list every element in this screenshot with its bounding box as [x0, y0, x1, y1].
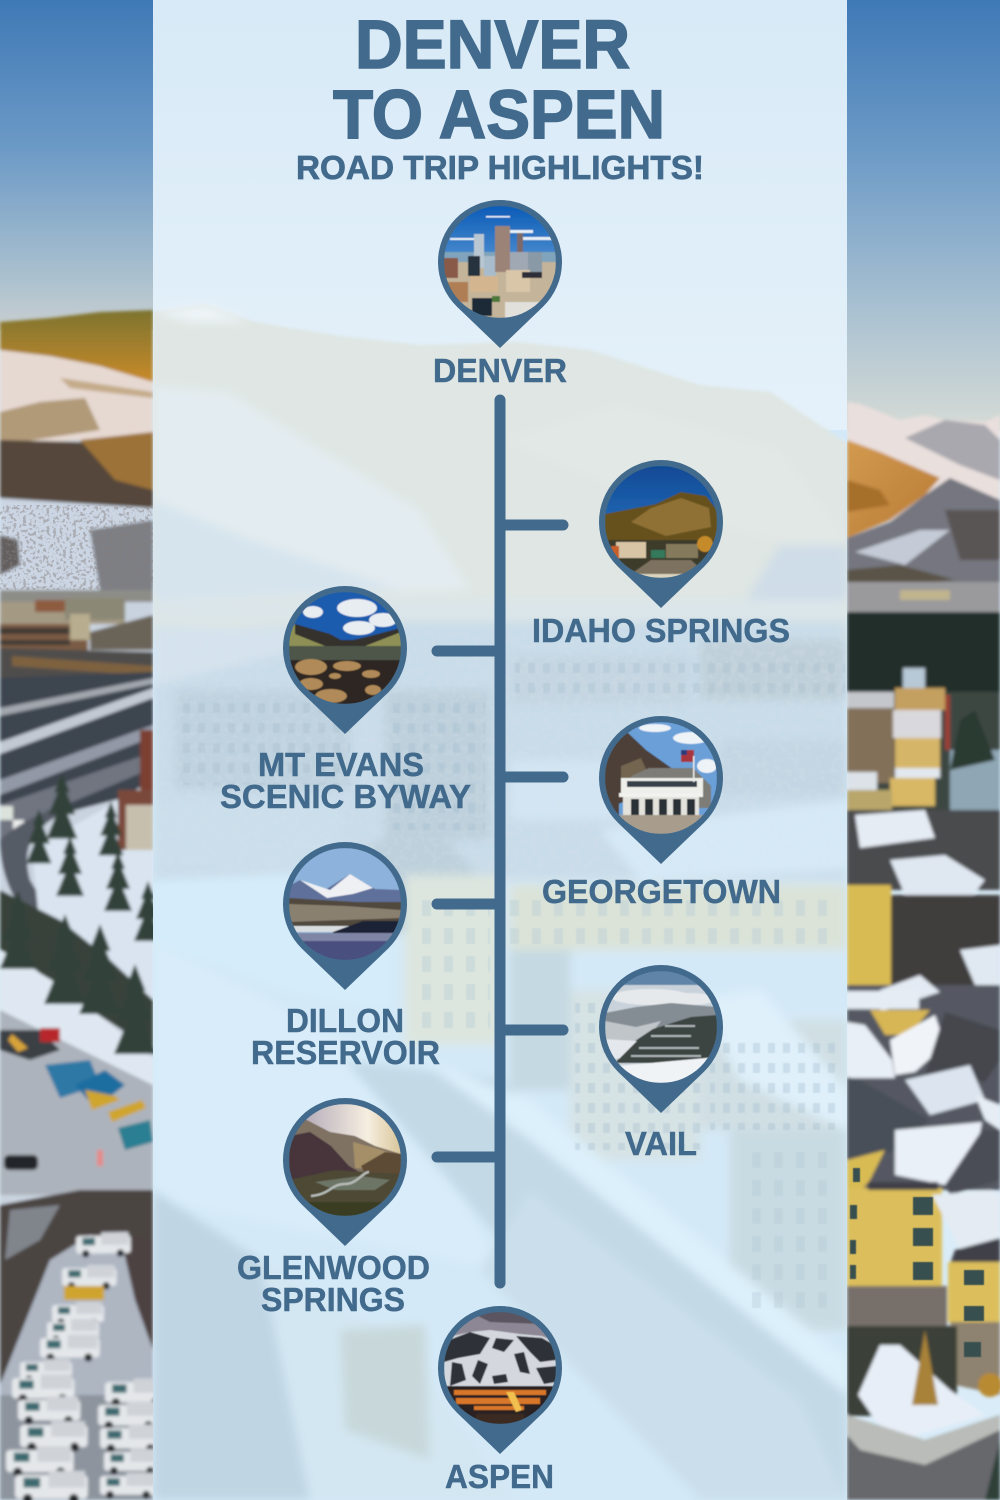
photo background: washed-out centre panel — [153, 296, 847, 1500]
pin: Glenwood Springs — [283, 1098, 407, 1246]
title — [333, 6, 665, 153]
label: Denver: DENVER — [433, 352, 567, 389]
pin: Vail — [599, 965, 723, 1113]
label: Glenwood Springs: SPRINGS — [261, 1281, 405, 1318]
pin: Georgetown — [599, 716, 723, 864]
pin: Idaho Springs — [599, 460, 723, 608]
label: Aspen: ASPEN — [445, 1458, 554, 1495]
title: DENVER — [355, 6, 630, 83]
label: Dillon Reservoir: DILLON — [286, 1002, 404, 1039]
label: Idaho Springs: IDAHO SPRINGS — [532, 612, 790, 649]
label: Mt Evans Scenic Byway — [220, 746, 471, 815]
photo background: right strip — [847, 0, 1000, 1500]
photo background: left strip — [0, 0, 167, 1500]
label: Georgetown: GEORGETOWN — [542, 873, 781, 910]
label: Vail: VAIL — [625, 1125, 697, 1162]
pin: Mt Evans Scenic Byway — [283, 586, 407, 734]
label: Dillon Reservoir: RESERVOIR — [251, 1034, 440, 1071]
pin: Aspen — [438, 1306, 562, 1454]
title: TO ASPEN — [333, 76, 665, 153]
timeline spine and branches — [437, 400, 563, 1283]
pin: Denver — [438, 200, 562, 348]
label: Mt Evans Scenic Byway: SCENIC BYWAY — [220, 778, 471, 815]
label: Dillon Reservoir — [251, 1002, 440, 1071]
label: Glenwood Springs — [237, 1249, 430, 1318]
label: Mt Evans Scenic Byway: MT EVANS — [258, 746, 424, 783]
pin: Dillon Reservoir — [283, 842, 407, 990]
subtitle: ROAD TRIP HIGHLIGHTS! — [296, 149, 704, 186]
label: Glenwood Springs: GLENWOOD — [237, 1249, 430, 1286]
